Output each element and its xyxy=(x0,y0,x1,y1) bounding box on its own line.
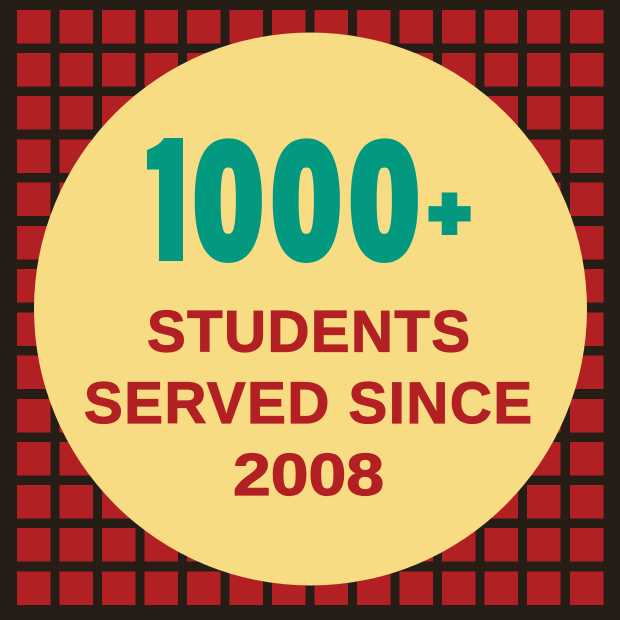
big number: 1000+: 1 xyxy=(129,105,209,302)
big number: 1000+: 0 xyxy=(194,113,262,290)
caption: students served since 2008: SERVED SINCE xyxy=(84,371,532,436)
big number: 1000+ xyxy=(147,138,471,263)
caption: students served since 2008 xyxy=(84,300,532,508)
big number: 1000+: 0 xyxy=(272,113,340,290)
caption: students served since 2008: 2008 xyxy=(233,442,384,508)
big number: 1000+: + xyxy=(430,176,469,252)
caption: students served since 2008: STUDENTS xyxy=(147,300,470,364)
yellow circle xyxy=(34,32,587,586)
big number: 1000+: 0 xyxy=(350,113,418,290)
